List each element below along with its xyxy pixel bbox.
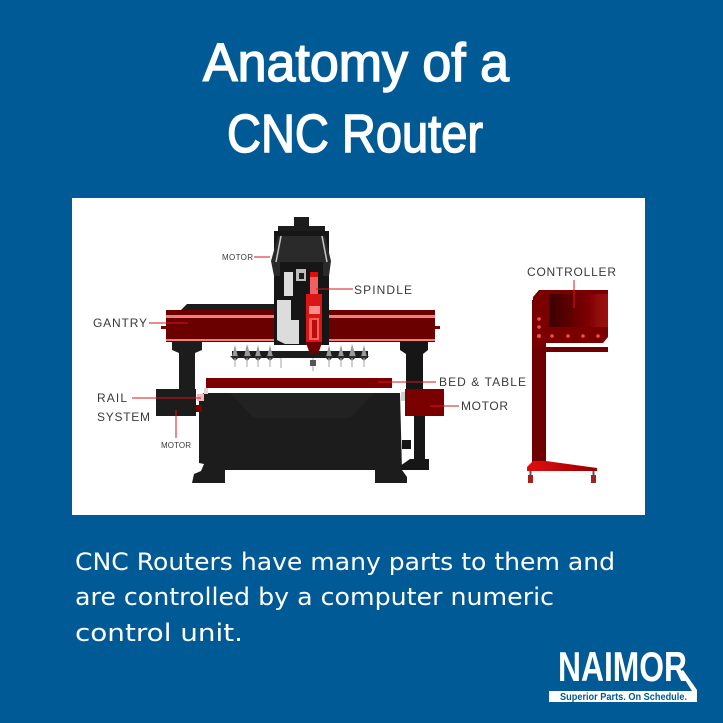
logo: NAIMOR bbox=[549, 643, 697, 703]
description text bbox=[75, 548, 615, 647]
controller wheels bbox=[528, 471, 596, 483]
controller unit bbox=[527, 290, 608, 483]
callout labels: SYSTEM bbox=[97, 410, 150, 424]
right column bbox=[400, 342, 429, 470]
callout labels: GANTRY bbox=[93, 316, 147, 330]
tool changer row bbox=[230, 344, 369, 371]
title bbox=[203, 33, 510, 164]
callout leader lines bbox=[132, 257, 574, 438]
description text: CNC Routers have many parts to them and bbox=[75, 548, 615, 576]
callout labels: SPINDLE bbox=[354, 283, 412, 297]
logo: NAIMOR: Superior Parts. On Schedule. bbox=[560, 691, 687, 703]
callout labels: BED & TABLE bbox=[439, 375, 526, 389]
left motor bbox=[156, 389, 196, 416]
description text: control unit. bbox=[75, 619, 243, 647]
bed and table bbox=[196, 378, 405, 412]
callout labels: RAIL bbox=[97, 391, 127, 405]
callout labels: CONTROLLER bbox=[527, 265, 616, 279]
router machine bbox=[156, 217, 444, 483]
callout labels: MOTOR bbox=[161, 441, 191, 450]
panel: CNC router diagram bbox=[72, 198, 645, 515]
right motor bbox=[405, 389, 444, 416]
gantry bbox=[161, 304, 440, 342]
callout labels: MOTOR bbox=[222, 253, 253, 262]
base and legs bbox=[192, 393, 407, 483]
callout labels bbox=[93, 253, 616, 450]
callout labels: MOTOR bbox=[461, 399, 508, 413]
spindle head bbox=[271, 217, 331, 354]
title: Anatomy of a bbox=[203, 33, 510, 93]
title: CNC Router bbox=[227, 104, 483, 164]
description text: are controlled by a computer numeric bbox=[75, 583, 554, 611]
controller base bbox=[527, 461, 597, 471]
left column bbox=[172, 342, 202, 392]
